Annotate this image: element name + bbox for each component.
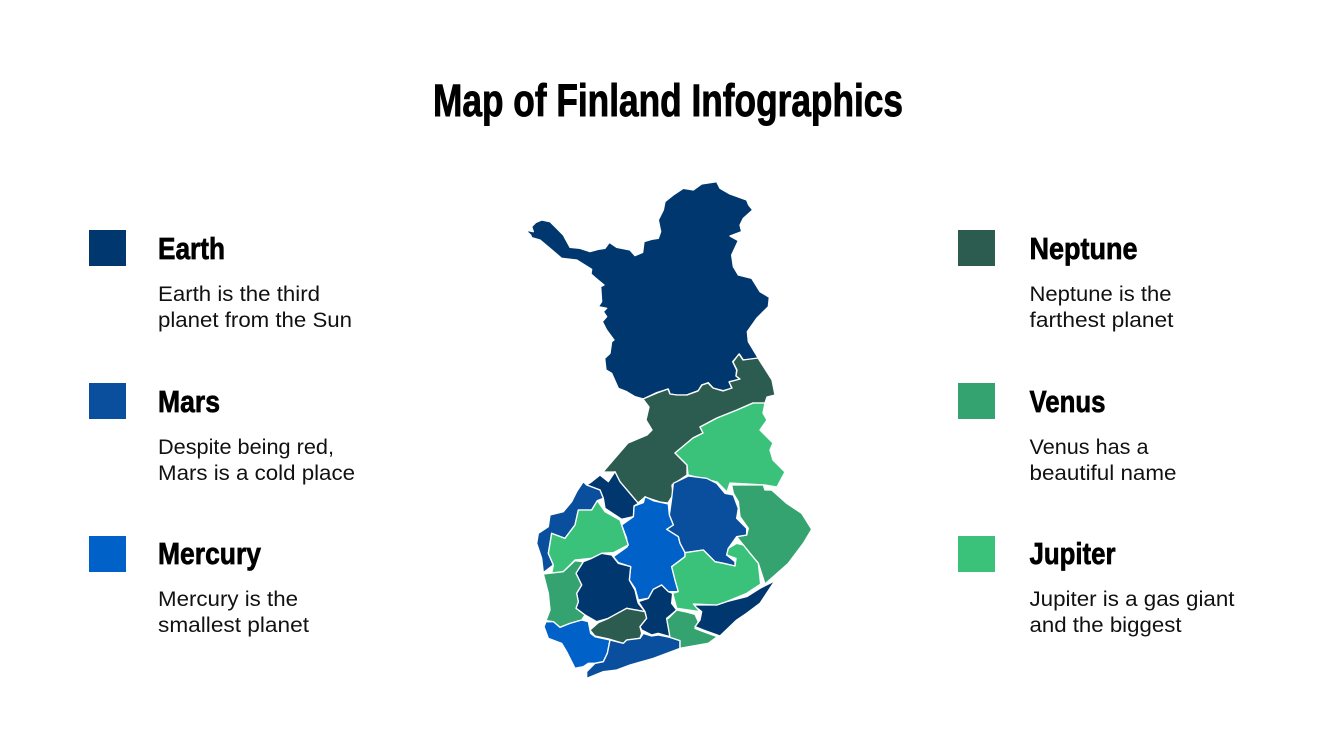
region: Southwest Finland xyxy=(544,620,610,668)
region: South Ostrobothnia xyxy=(548,501,628,573)
text: Earth description xyxy=(158,283,352,332)
region: South Karelia xyxy=(693,581,775,636)
region: Kanta-Hame xyxy=(590,608,647,643)
swatch: Earth xyxy=(89,230,126,266)
region: Pirkanmaa xyxy=(576,553,645,622)
heading: Jupiter: Jupiter xyxy=(1030,536,1116,571)
region: North Savo xyxy=(667,476,747,566)
region: North Karelia xyxy=(732,485,812,584)
heading: Venus: Venus xyxy=(1030,384,1106,419)
heading: Earth: Earth xyxy=(158,231,225,266)
region: Satakunta xyxy=(543,561,585,627)
text: Neptune description: farthest planet xyxy=(1030,309,1174,332)
text: Venus description: beautiful name xyxy=(1030,462,1176,485)
heading: Mars: Mars xyxy=(158,384,220,419)
text: Mercury description xyxy=(158,588,309,637)
text: Jupiter description xyxy=(1030,588,1235,637)
region: northern Ostrobothnia xyxy=(603,354,775,503)
swatch: Mars xyxy=(89,383,126,419)
heading: Mercury: Mercury xyxy=(158,536,262,571)
legend item: Neptune xyxy=(958,230,1174,332)
legend item: Mars xyxy=(89,383,355,485)
legend item: Venus xyxy=(958,383,1176,485)
text: Earth description: Earth is the third xyxy=(158,283,320,306)
swatch: Mercury xyxy=(89,536,126,572)
region: Paijat-Hame xyxy=(638,585,677,637)
legend item: Jupiter xyxy=(958,536,1235,637)
region: Central Finland xyxy=(613,497,685,600)
region: Kainuu xyxy=(675,403,785,492)
heading: Neptune: Neptune xyxy=(1030,231,1138,266)
legend item: Mercury xyxy=(89,536,309,637)
swatch: Venus xyxy=(958,383,995,419)
swatch: Jupiter xyxy=(958,536,995,572)
text: Neptune description xyxy=(1030,283,1174,332)
region: Ostrobothnia xyxy=(537,482,603,573)
region: South Savo xyxy=(672,543,761,612)
text: Mars description xyxy=(158,436,355,485)
title: Map of Finland Infographics xyxy=(433,75,903,126)
map of Finland xyxy=(525,182,812,678)
region: Uusimaa xyxy=(587,633,680,678)
text: Mercury description: Mercury is the xyxy=(158,588,298,611)
text: Mercury description: smallest planet xyxy=(158,614,309,637)
text: Earth description: planet from the Sun xyxy=(158,309,352,332)
region: Central Ostrobothnia xyxy=(587,472,638,519)
text: Neptune description: Neptune is the xyxy=(1030,283,1172,306)
text: Jupiter description: and the biggest xyxy=(1030,614,1182,637)
swatch: Neptune xyxy=(958,230,995,266)
region: Kymenlaakso xyxy=(667,610,717,648)
text: Jupiter description: Jupiter is a gas giant xyxy=(1030,588,1235,611)
region: Lapland xyxy=(525,182,769,399)
text: Mars description: Despite being red, xyxy=(158,436,334,459)
text: Venus description: Venus has a xyxy=(1030,436,1149,459)
text: Mars description: Mars is a cold place xyxy=(158,462,355,485)
legend item: Earth xyxy=(89,230,352,332)
text: Venus description xyxy=(1030,436,1176,485)
southern regions xyxy=(537,472,812,678)
